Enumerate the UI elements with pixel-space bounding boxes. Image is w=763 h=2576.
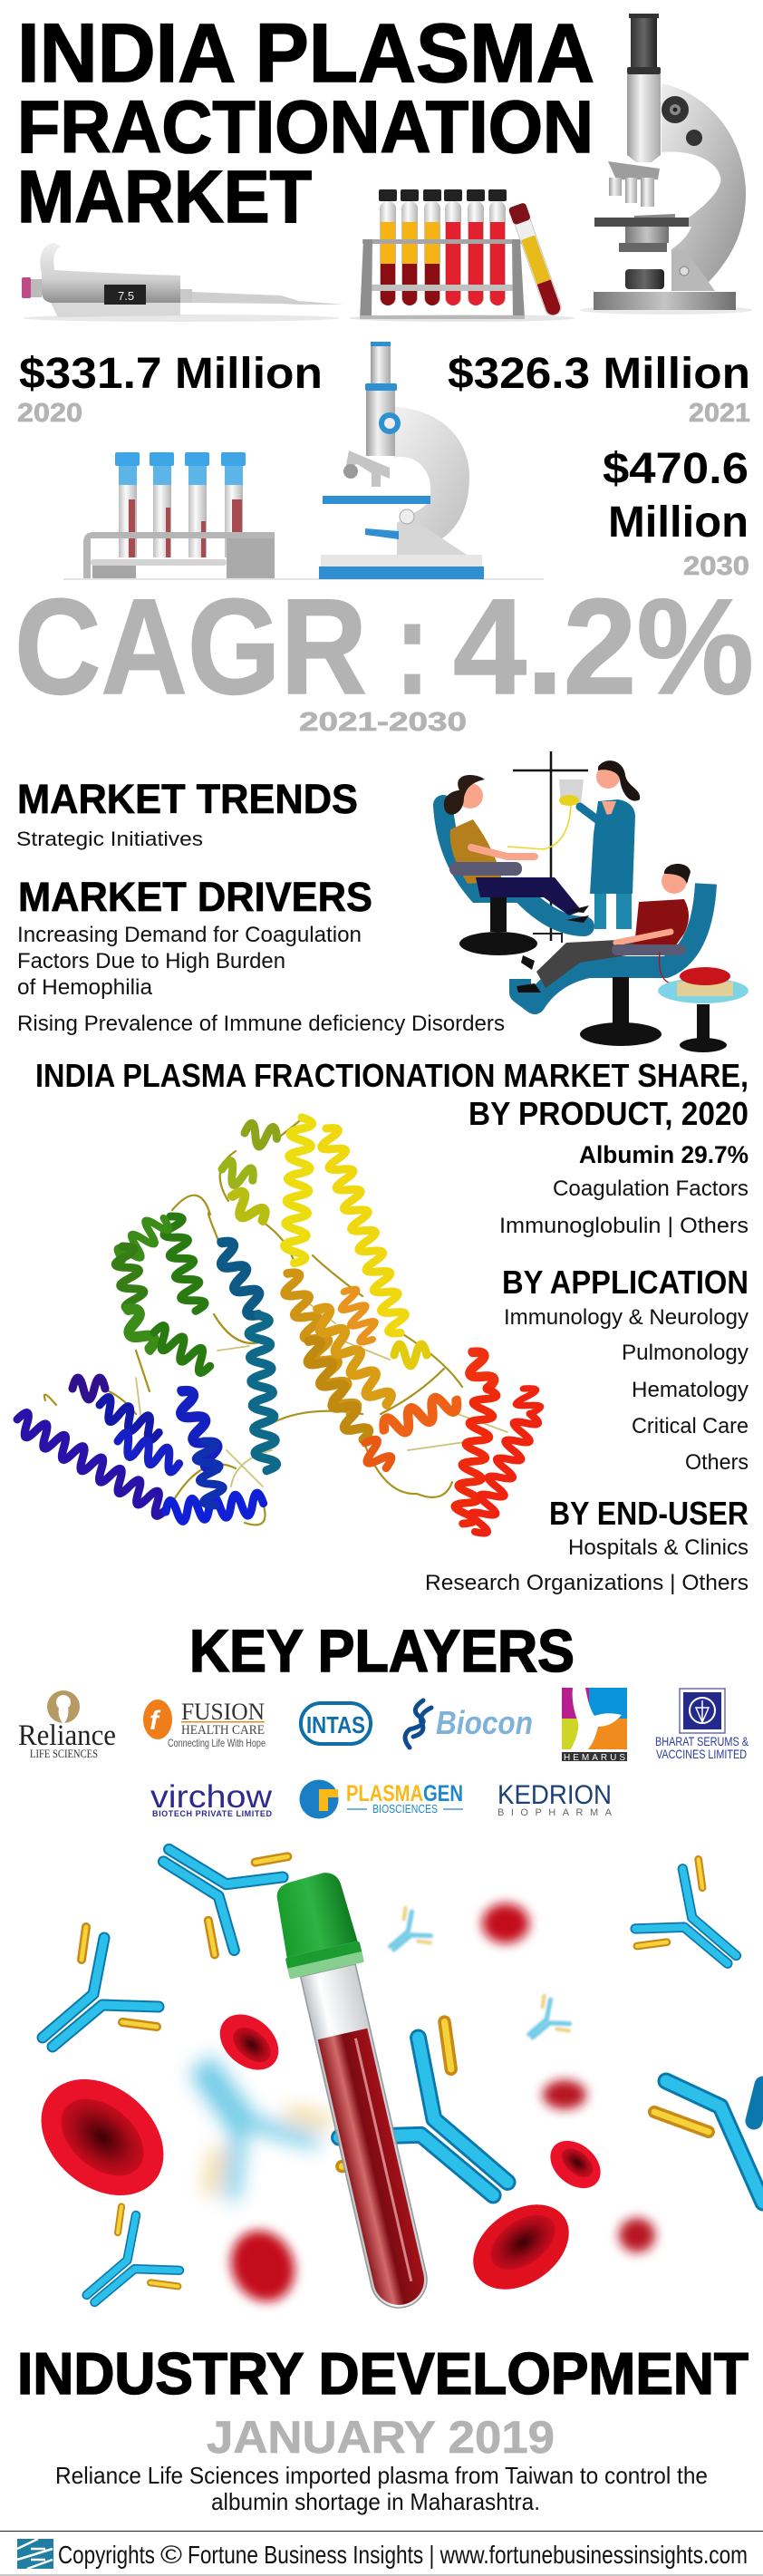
woman in chair: [443, 775, 589, 955]
stat: 2020: 2020: [17, 399, 82, 428]
man in chair: [517, 864, 706, 1046]
red blood cells: [18, 2003, 610, 2307]
text: market trends: MARKET TRENDS: [17, 776, 358, 822]
illustration: protein structure: [12, 1117, 541, 1536]
text: market drivers: [17, 874, 505, 1036]
logo: Plasmagen: [299, 1780, 463, 1818]
segment list: application: Hematology: [632, 1378, 749, 1402]
illustration: plasma donation: [443, 751, 749, 1052]
text: market drivers: MARKET DRIVERS: [18, 874, 372, 920]
logo: Intas: INTAS: [306, 1711, 365, 1738]
segment list: product: Coagulation Factors: [553, 1177, 749, 1201]
logo: Kedrion: KEDRION: [497, 1780, 612, 1810]
stat: 2020: [17, 350, 323, 428]
segment list: end-user: Hospitals & Clinics: [568, 1535, 749, 1560]
text: market drivers: of Hemophilia: [17, 975, 153, 1000]
heading: market share: [35, 1057, 749, 1132]
segment list: application: Others: [685, 1450, 749, 1475]
text: development description: Reliance Life Sciences imported plasma from Taiwan to control the: [55, 2462, 708, 2489]
segment list: product: Albumin 29.7%: [579, 1141, 749, 1168]
text: development description: [55, 2462, 708, 2515]
text: market drivers: Rising Prevalence of Immune deficiency Disorders: [17, 1012, 505, 1036]
segment list: application: [502, 1264, 749, 1475]
heading: market share: BY PRODUCT, 2020: [468, 1095, 749, 1132]
segment list: product: Immunoglobulin | Others: [499, 1214, 749, 1238]
footer: Copyrights: [58, 2541, 155, 2569]
antibody group: [43, 1816, 763, 2302]
logo: Fusion Health Care: [143, 1699, 266, 1749]
CAGR: 2021-2030: [299, 708, 467, 737]
logo: Bharat Serums: [655, 1689, 749, 1761]
CAGR: CAGR: [14, 570, 367, 722]
segment list: application: Pulmonology: [622, 1341, 749, 1365]
logo: Fusion Health Care: f: [150, 1706, 161, 1736]
illustration: blood cells and antibodies: [18, 1816, 763, 2316]
icon: blue microscope: [319, 342, 484, 579]
text: market trends: [16, 776, 358, 850]
title: INDIA PLASMA: [17, 7, 594, 100]
logo: Hemarus: HEMARUS: [564, 1753, 625, 1763]
logo: Plasmagen: GEN: [423, 1781, 463, 1806]
blood test tube: [268, 1868, 441, 2316]
date: JANUARY 2019: [207, 2412, 555, 2463]
logo: Kedrion: BIOPHARMA: [497, 1807, 613, 1818]
icon: Fortune Business Insights logo: [17, 2539, 53, 2569]
CAGR: :: [395, 570, 430, 722]
stat: 2021: [448, 350, 750, 428]
segment list: application: Critical Care: [632, 1414, 749, 1438]
logo: Virchow: virchow: [150, 1779, 273, 1815]
stat: 2021: $326.3 Million: [448, 350, 750, 398]
logo: Plasmagen: PLASMA: [346, 1781, 423, 1806]
logo: Plasmagen: BIOSCIENCES: [372, 1802, 438, 1816]
CAGR: 4.2%: [453, 570, 754, 722]
nurse: [580, 760, 640, 929]
icon: blue tube rack: [63, 452, 544, 579]
heading: industry development: INDUSTRY DEVELOPMENT: [17, 2340, 749, 2407]
logo: Fusion Health Care: HEALTH CARE: [181, 1723, 265, 1738]
icon: pipette: [22, 243, 343, 322]
segment list: application: Immunology & Neurology: [504, 1305, 749, 1330]
icon: pipette: 7.5: [118, 289, 134, 303]
stat: 2030: [603, 445, 749, 581]
blurred background elements: [188, 1903, 655, 2312]
title: [17, 7, 594, 238]
logo: Reliance: LIFE SCIENCES: [30, 1747, 98, 1760]
stat: 2030: 2030: [683, 552, 749, 581]
text: market trends: Strategic Initiatives: [16, 828, 203, 850]
stat: 2020: $331.7 Million: [19, 350, 323, 398]
title: MARKET: [17, 156, 312, 238]
logo: Hemarus: [562, 1688, 627, 1763]
side table with blood bag: [658, 967, 749, 1052]
heading: key players: KEY PLAYERS: [189, 1617, 575, 1684]
icon: test tube rack: [349, 189, 575, 322]
stat: 2021: 2021: [689, 399, 750, 428]
CAGR: [14, 570, 754, 737]
logo: Intas: [301, 1703, 371, 1744]
text: market drivers: Factors Due to High Burden: [17, 949, 285, 973]
segment list: end-user: [425, 1495, 749, 1595]
footer: [0, 2531, 763, 2576]
icon: gray microscope: [580, 14, 752, 315]
segment list: end-user: Research Organizations | Others: [425, 1571, 749, 1595]
text: market drivers: Increasing Demand for Coagulation: [17, 923, 362, 947]
segment list: product: [499, 1141, 749, 1238]
title: FRACTIONATION: [17, 86, 594, 169]
logo: Reliance: [18, 1690, 116, 1760]
stat: 2030: $470.6: [603, 445, 749, 493]
logo: Virchow: BIOTECH PRIVATE LIMITED: [152, 1809, 272, 1818]
logo: Biocon: [405, 1700, 533, 1748]
logo: Fusion Health Care: FUSION: [181, 1699, 265, 1725]
logo: Biocon: Biocon: [436, 1704, 533, 1741]
text: development description: albumin shortage in Maharashtra.: [211, 2488, 540, 2515]
footer: ©: [160, 2541, 182, 2569]
logo: Reliance: Reliance: [18, 1719, 116, 1752]
logo: Fusion Health Care: Connecting Life With Hope: [168, 1737, 266, 1749]
stat: 2030: Million: [608, 499, 749, 547]
